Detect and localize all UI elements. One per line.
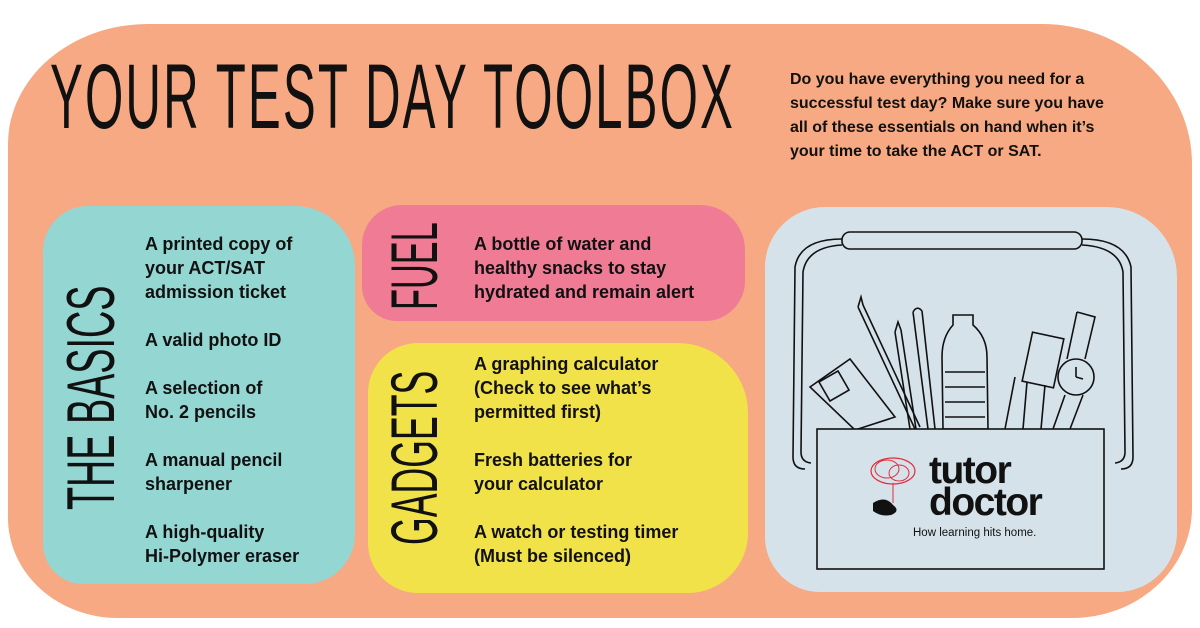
- list: basics items: No. 2 pencils: [145, 402, 256, 422]
- intro text: your time to take the ACT or SAT.: [790, 143, 1042, 160]
- list: basics items: Hi-Polymer eraser: [145, 546, 299, 566]
- list: gadget items: your calculator: [474, 474, 603, 494]
- icon: brain scribble: [870, 457, 916, 516]
- intro text: successful test day? Make sure you have: [790, 95, 1104, 112]
- text: brand name: doctor: [929, 481, 1041, 524]
- list: basics items: A high-quality: [145, 522, 264, 542]
- panel: the basics: [43, 206, 355, 584]
- heading: gadgets: GADGETS: [377, 371, 451, 545]
- list: basics items: A selection of: [145, 378, 262, 398]
- panel: fuel: [362, 205, 745, 321]
- intro text: Do you have everything you need for a: [790, 71, 1084, 88]
- intro text: [790, 71, 1104, 160]
- panel: toolbox illustration: [765, 207, 1177, 592]
- list: basics items: [145, 234, 299, 566]
- list: basics items: A printed copy of: [145, 234, 292, 254]
- text: fuel item: A bottle of water and: [474, 234, 651, 254]
- list: gadget items: A watch or testing timer: [474, 522, 678, 542]
- heading: fuel: FUEL: [377, 222, 451, 310]
- logo: tutor doctor: [870, 449, 1042, 539]
- text: tagline: How learning hits home.: [913, 527, 1036, 539]
- text: brand name: [929, 449, 1042, 524]
- list: basics items: admission ticket: [145, 282, 286, 302]
- list: gadget items: A graphing calculator: [474, 354, 658, 374]
- text: brand name: tutor: [929, 449, 1010, 492]
- text: fuel item: [474, 234, 694, 302]
- list: gadget items: (Must be silenced): [474, 546, 631, 566]
- icon: toolbox: [792, 231, 1134, 570]
- title: YOUR TEST DAY TOOLBOX: [50, 46, 735, 148]
- list: basics items: your ACT/SAT: [145, 258, 265, 278]
- text: fuel item: hydrated and remain alert: [474, 282, 694, 302]
- list: gadget items: (Check to see what’s: [474, 378, 651, 398]
- list: gadget items: permitted first): [474, 402, 601, 422]
- list: basics items: A valid photo ID: [145, 330, 281, 350]
- list: basics items: sharpener: [145, 474, 232, 494]
- panel: gadgets: [368, 343, 748, 593]
- list: gadget items: [474, 354, 678, 566]
- heading: the basics: THE BASICS: [53, 286, 129, 510]
- list: gadget items: Fresh batteries for: [474, 450, 632, 470]
- list: basics items: A manual pencil: [145, 450, 282, 470]
- intro text: all of these essentials on hand when it’s: [790, 119, 1094, 136]
- text: fuel item: healthy snacks to stay: [474, 258, 666, 278]
